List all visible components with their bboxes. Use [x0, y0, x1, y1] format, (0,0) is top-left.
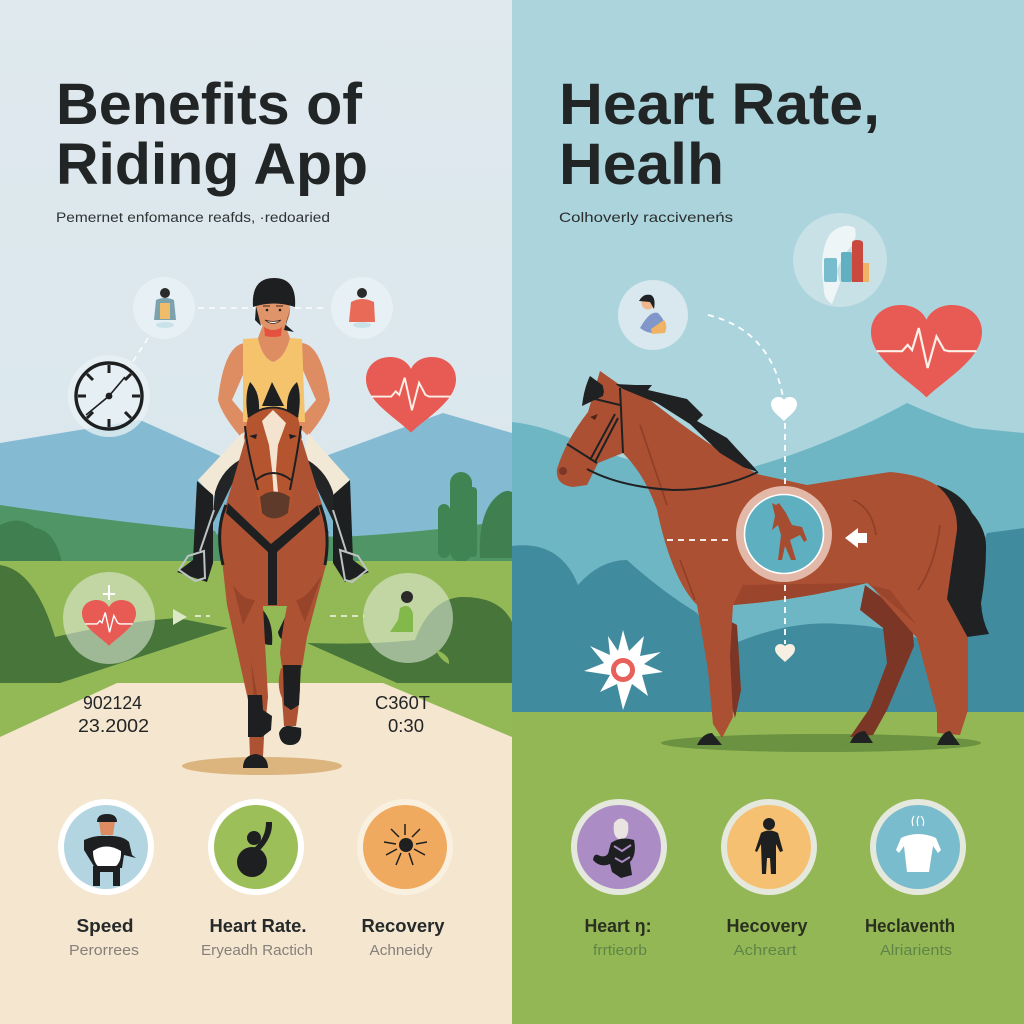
connector lines [132, 308, 364, 616]
mountains left [0, 413, 512, 537]
stat: speed: Perorrees [69, 943, 139, 959]
hooves [697, 731, 960, 745]
ground shadow [661, 734, 981, 752]
illustration: rider on horse [177, 278, 369, 768]
hedge left [0, 521, 62, 563]
icon: small heart bottom [775, 644, 795, 662]
hooves [243, 726, 301, 768]
rider top [243, 338, 305, 422]
chest edge [220, 505, 327, 565]
saddle [212, 457, 336, 535]
icon: rider badge right [331, 277, 393, 339]
ground shadow [182, 757, 342, 775]
stat: speed [58, 799, 154, 959]
metric text right: C360T [375, 693, 430, 713]
eyes [249, 434, 297, 439]
cactus [438, 472, 477, 562]
metric text right [376, 696, 430, 732]
metric text left: 23.2002 [78, 716, 149, 736]
icon: rider badge green [363, 573, 453, 664]
panel: right heart rate and health [512, 0, 1024, 1024]
connector: dashed curve [708, 315, 783, 397]
blaze [262, 410, 286, 498]
stat: recovery [721, 799, 817, 959]
illustration: horse side view [557, 371, 989, 745]
icon: heart rate large left [366, 357, 456, 433]
forelock [582, 376, 605, 406]
stat: speed: Speed [76, 916, 134, 936]
mane [615, 384, 758, 472]
horse muscle lines [640, 425, 940, 600]
title [559, 72, 880, 197]
eye [590, 414, 598, 420]
icon: rider badge left [133, 277, 195, 339]
title: Benefits of [56, 72, 363, 137]
nostril [559, 467, 567, 475]
dark green field left [0, 565, 228, 683]
metric text right: 0:30 [388, 716, 424, 736]
horse shading [733, 583, 917, 625]
hill light [512, 403, 1024, 720]
icon: stopwatch gauge [68, 355, 150, 437]
hill dark [512, 528, 1024, 720]
panel: left riding benefits [0, 0, 512, 1024]
title: Riding App [56, 132, 368, 197]
title: Healh [559, 132, 724, 197]
ear [600, 371, 618, 392]
far legs [263, 610, 285, 645]
horse neck body and near leg [220, 440, 327, 757]
connector lines [667, 423, 785, 644]
icon: heart rate large right [871, 305, 982, 397]
dark green field right [307, 597, 512, 683]
subtitle: Pemernet enfomance reafds, ·redoaried [56, 210, 330, 225]
stat: recovery: Achneidy [370, 943, 433, 959]
stat: heart rate [201, 799, 313, 959]
meadow [512, 712, 1024, 1024]
saddle pad straps [213, 484, 333, 535]
stat: heart rate: Eryeadh Ractich [201, 943, 313, 959]
metric text left [79, 696, 148, 732]
subtitle: Colhoverly racciveneńs [559, 209, 733, 225]
boots [177, 480, 369, 582]
breastplate strap [226, 503, 320, 605]
tail [937, 485, 989, 637]
stat: recovery: Recovery [362, 916, 444, 936]
stat: heart: Heart ŋ: [584, 916, 652, 936]
body muscle shading [233, 575, 322, 700]
arrow: white left pointer [845, 528, 867, 548]
icon: person badge [618, 280, 688, 350]
stat: recovery: Hecovery [726, 916, 808, 936]
stirrups [179, 510, 367, 582]
horse head [244, 408, 302, 518]
bush right [480, 491, 512, 558]
green hills [0, 505, 512, 561]
stat: heart [571, 799, 667, 959]
muzzle [260, 492, 290, 518]
far front leg [728, 620, 741, 718]
bridle [245, 408, 301, 490]
stat: recovery [357, 799, 453, 959]
riding path [0, 683, 512, 1024]
title: Heart Rate, [559, 72, 880, 137]
rider arms [218, 343, 330, 436]
bridle and reins [567, 388, 758, 490]
stat: recovery: Achreart [734, 943, 796, 959]
stat: heart: frrtieorb [593, 943, 647, 959]
arrow: pointer triangle [173, 609, 187, 625]
horse body [557, 371, 968, 738]
icon: heart rate badge [63, 572, 155, 664]
rider helmet [253, 278, 295, 307]
leg boots [248, 665, 301, 737]
stat: health: Alriarients [880, 943, 952, 959]
stat: health: Heclaventh [865, 916, 955, 936]
icon: sun burst [584, 630, 663, 710]
rider face [255, 304, 294, 337]
raised leg lower [279, 668, 300, 726]
stat: heart rate: Heart Rate. [210, 916, 306, 936]
title [56, 72, 368, 197]
rider neck [258, 322, 290, 362]
stat: health [865, 799, 966, 959]
icon: chart badge [793, 213, 887, 307]
ears and forelock [246, 382, 300, 418]
icon: small heart top [771, 397, 797, 421]
metric text left: 902124 [83, 693, 142, 713]
icon: heart monitor ring [736, 486, 832, 582]
far hind leg [850, 585, 914, 737]
rider thighs [198, 433, 350, 497]
meadow [0, 561, 512, 741]
